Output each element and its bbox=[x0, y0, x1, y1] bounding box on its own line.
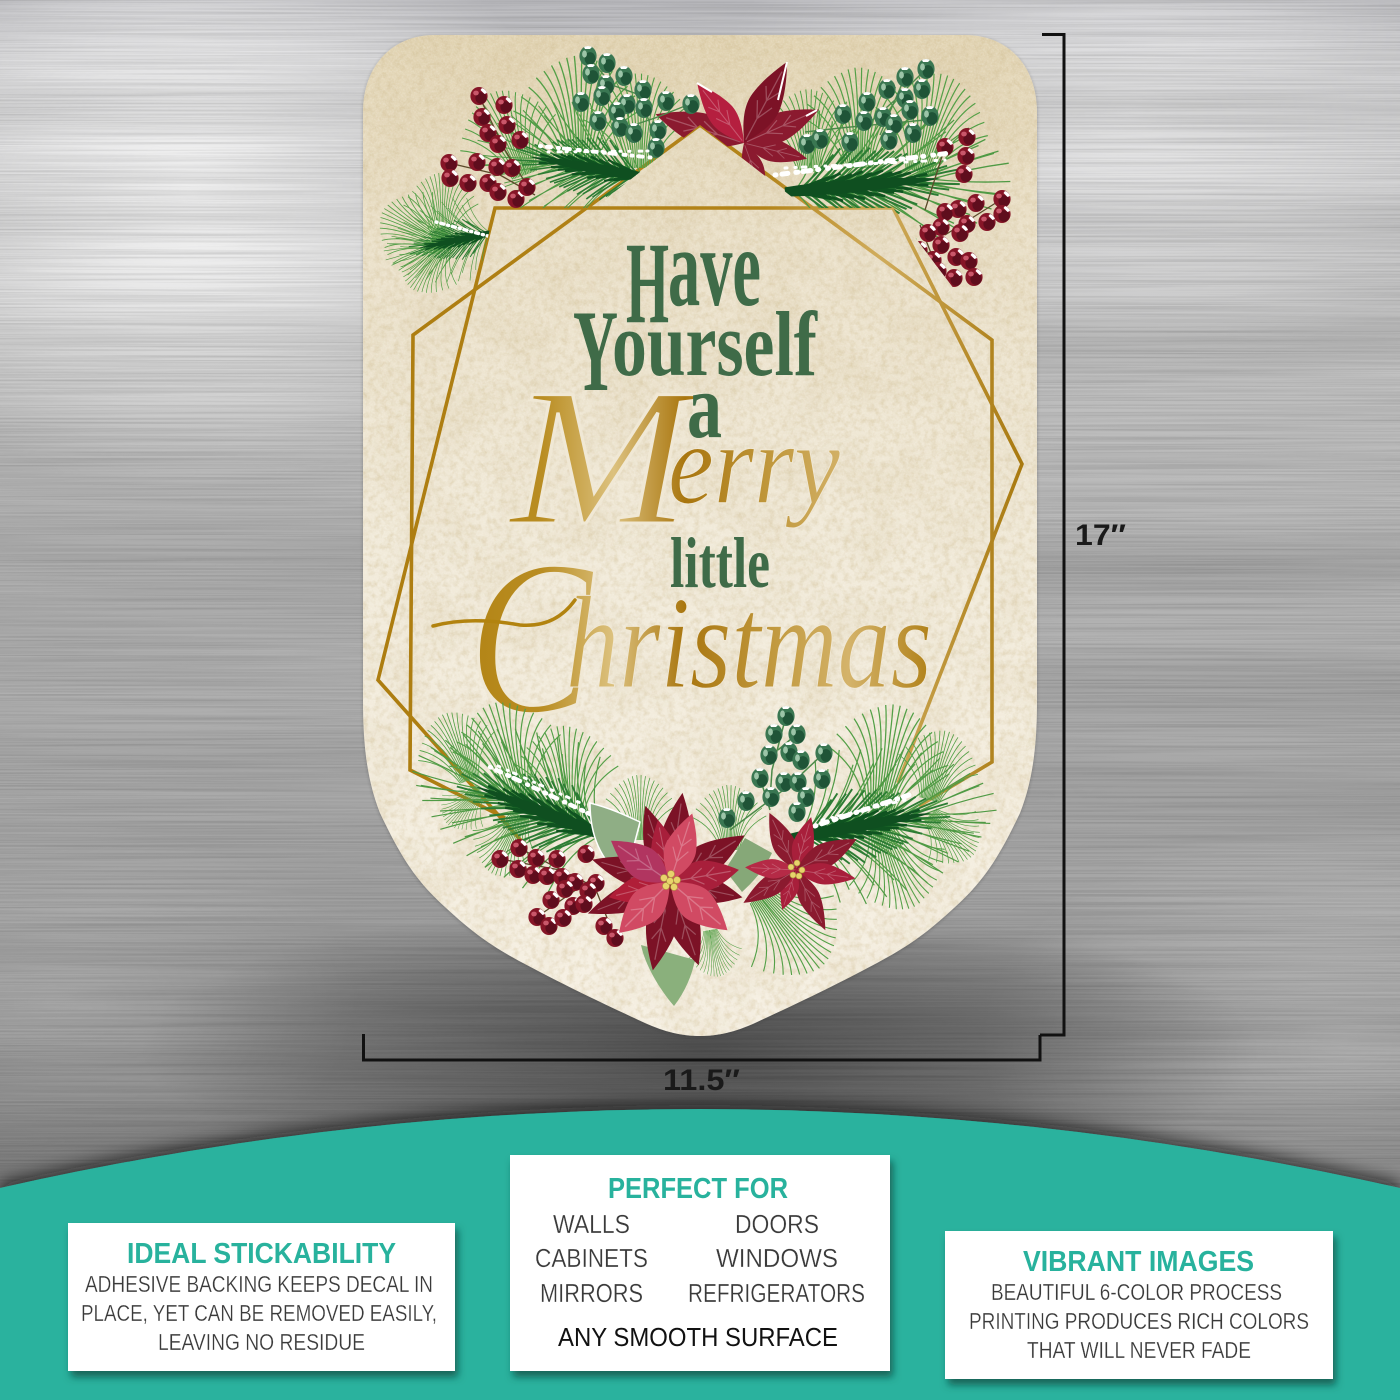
surfaces list bbox=[535, 1209, 865, 1308]
line: Christmas: C bbox=[468, 515, 595, 761]
top floral spray bbox=[363, 46, 1017, 308]
line: Have: H bbox=[626, 219, 669, 348]
bottom floral spray bbox=[388, 689, 1009, 1006]
card body text bbox=[81, 1271, 437, 1355]
card body text bbox=[969, 1279, 1309, 1363]
surfaces list: WALLS bbox=[553, 1209, 630, 1239]
card body text: THAT WILL NEVER FADE bbox=[1027, 1337, 1251, 1363]
bottom red berries bbox=[491, 839, 624, 947]
top poinsettia bbox=[656, 62, 819, 176]
line: Christmas: hristmas bbox=[566, 569, 932, 716]
top pine sprigs bbox=[363, 56, 1017, 308]
surfaces list: MIRRORS bbox=[540, 1278, 643, 1308]
bottom green eucalyptus bbox=[718, 706, 833, 830]
bottom pine sprigs bbox=[388, 689, 1009, 1001]
card heading: VIBRANT IMAGES bbox=[1023, 1246, 1254, 1278]
card heading: PERFECT FOR bbox=[608, 1173, 788, 1205]
card body text: PRINTING PRODUCES RICH COLORS bbox=[969, 1308, 1309, 1334]
green leaves bbox=[590, 803, 772, 1006]
height label: 17″ bbox=[1075, 519, 1126, 552]
top red berries bbox=[440, 87, 1011, 287]
card body text: PLACE, YET CAN BE REMOVED EASILY, bbox=[81, 1300, 437, 1326]
teal curved footer bbox=[0, 1109, 1400, 1400]
card body text: ADHESIVE BACKING KEEPS DECAL IN bbox=[85, 1271, 433, 1297]
line: a: a bbox=[687, 355, 722, 457]
card heading: IDEAL STICKABILITY bbox=[127, 1238, 396, 1270]
small poinsettia bbox=[738, 808, 862, 935]
top snow bbox=[436, 146, 950, 236]
surfaces list: CABINETS bbox=[535, 1243, 648, 1273]
large poinsettia bbox=[583, 791, 753, 973]
card: ideal stickability bbox=[68, 1223, 455, 1371]
any smooth surface: ANY SMOOTH SURFACE bbox=[558, 1322, 838, 1352]
surfaces list: WINDOWS bbox=[716, 1243, 838, 1273]
gold geometric frame bbox=[378, 125, 1022, 845]
flourish on Christmas bbox=[433, 600, 575, 626]
card: perfect for bbox=[510, 1155, 890, 1371]
title: Have Yourself a Merry little Christmas bbox=[433, 206, 932, 761]
width label: 11.5″ bbox=[663, 1064, 740, 1097]
bottom snow bbox=[490, 766, 912, 826]
card body text: LEAVING NO RESIDUE bbox=[158, 1329, 365, 1355]
line: Merry: M bbox=[507, 349, 701, 566]
decal: shield shape bbox=[360, 30, 1040, 1040]
line: little: little bbox=[670, 523, 770, 603]
dimension line: width bbox=[364, 1034, 1040, 1097]
line: Merry: erry bbox=[668, 401, 840, 529]
card body text: BEAUTIFUL 6-COLOR PROCESS bbox=[991, 1279, 1282, 1305]
top green eucalyptus bbox=[572, 46, 939, 158]
card: vibrant images bbox=[945, 1231, 1333, 1379]
dimension line: height bbox=[1040, 34, 1126, 1035]
surfaces list: REFRIGERATORS bbox=[688, 1278, 865, 1308]
line: Yourself: Y bbox=[573, 287, 618, 416]
line: Have: ave bbox=[668, 206, 761, 330]
line: Yourself: ourself bbox=[612, 293, 818, 395]
surfaces list: DOORS bbox=[735, 1209, 819, 1239]
